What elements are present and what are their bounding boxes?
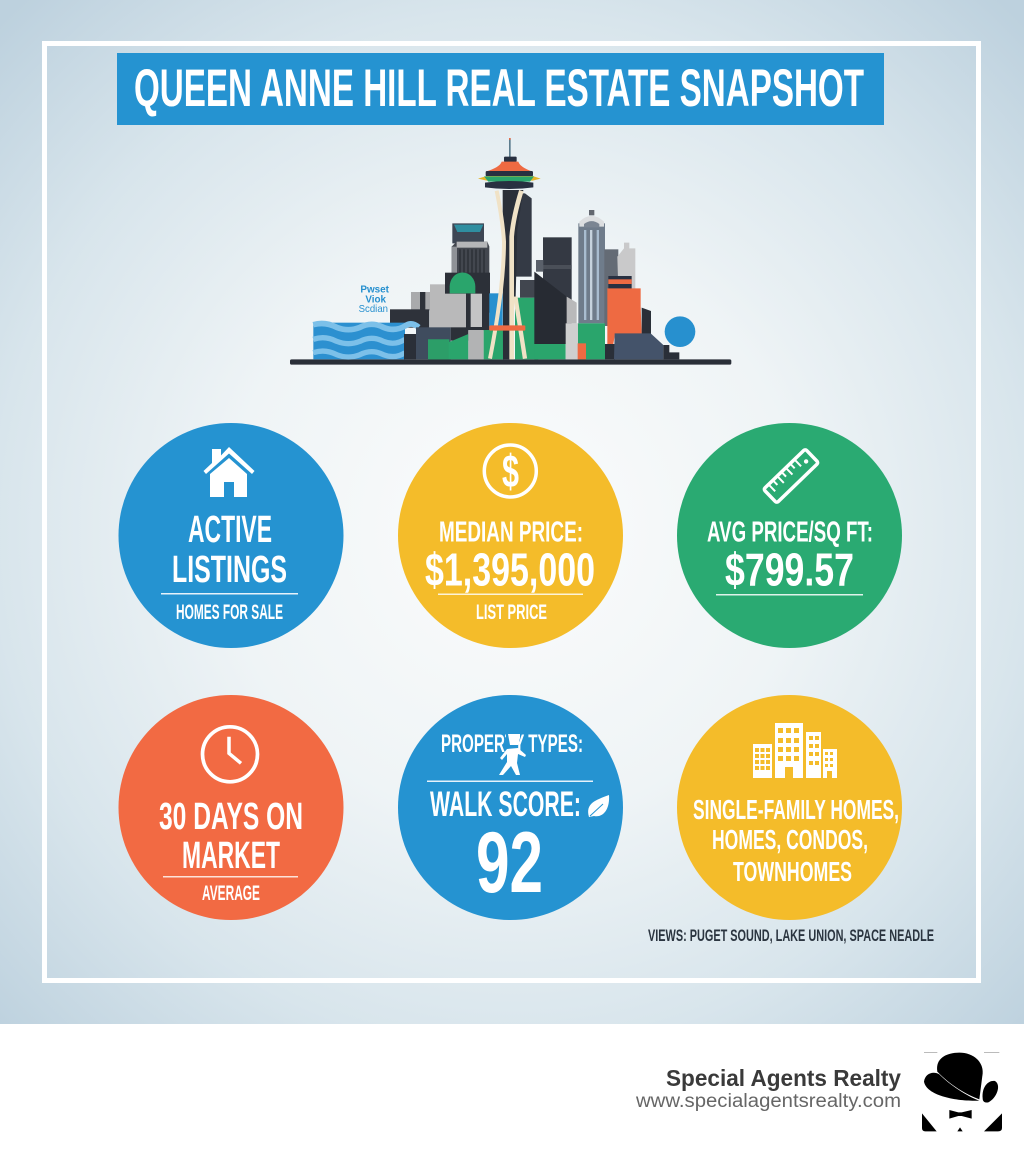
text: days on market: MARKET <box>182 835 280 877</box>
text: property types: PROPERTY TYPES: <box>441 730 583 758</box>
icon: ruler <box>764 449 818 503</box>
text: median price: $1,395,000 <box>425 544 595 596</box>
ground line <box>290 359 731 365</box>
footer brand <box>635 1065 901 1112</box>
text: price per square foot: AVG PRICE/SQ FT: <box>707 516 873 548</box>
skyline illustration <box>290 138 731 365</box>
text: active listings: LISTINGS <box>172 549 287 591</box>
white frame <box>44 44 978 980</box>
panel: active listings <box>118 423 344 648</box>
text: days on market: 30 DAYS ON <box>159 796 303 838</box>
icon: leaf <box>588 795 609 817</box>
icon: dollar coin: $ <box>502 445 519 497</box>
text: active listings: ACTIVE <box>188 509 272 551</box>
number: 92: 92 <box>476 815 543 911</box>
left blocks <box>390 272 503 330</box>
text: home types: SINGLE-FAMILY HOMES, <box>693 794 899 825</box>
text: walk score: WALK SCORE: <box>430 785 581 824</box>
panel: median price <box>398 423 623 648</box>
text: days on market: AVERAGE <box>202 882 260 905</box>
text: active listings: HOMES FOR SALE <box>176 600 283 624</box>
icon: house <box>204 447 254 497</box>
text: home types <box>693 794 899 887</box>
icon: walker <box>499 733 526 775</box>
sun circle <box>665 316 695 347</box>
puget label <box>359 285 390 315</box>
text: price per square foot <box>707 516 873 596</box>
text: median price <box>425 516 595 624</box>
text: days on market <box>159 796 303 905</box>
panel: days on market <box>118 695 344 920</box>
water waves <box>313 323 419 359</box>
base blocks <box>404 260 605 359</box>
puget label: Scdian <box>359 304 388 315</box>
text: home types: HOMES, CONDOS, <box>712 824 868 855</box>
puget label: Pwset <box>360 285 390 296</box>
footer brand: Special Agents Realty <box>666 1065 901 1091</box>
text: median price: LIST PRICE <box>476 600 547 624</box>
icon: clock <box>202 727 258 782</box>
text: home types: TOWNHOMES <box>733 856 852 887</box>
text: median price: MEDIAN PRICE: <box>439 516 583 548</box>
puget label: Viok <box>365 295 387 306</box>
logo <box>922 1052 1002 1131</box>
back towers <box>452 193 635 326</box>
space needle <box>478 138 541 359</box>
right blocks <box>605 276 679 359</box>
panel: price per square foot <box>677 423 902 648</box>
title banner <box>117 53 884 125</box>
icon: dollar coin <box>484 445 536 497</box>
panel: walk score <box>398 695 623 920</box>
text: price per square foot: $799.57 <box>725 544 854 596</box>
panel: property types <box>677 695 902 920</box>
footer brand: www.specialagentsrealty.com <box>635 1091 901 1112</box>
icon: buildings <box>753 723 837 778</box>
text: active listings <box>161 509 298 624</box>
